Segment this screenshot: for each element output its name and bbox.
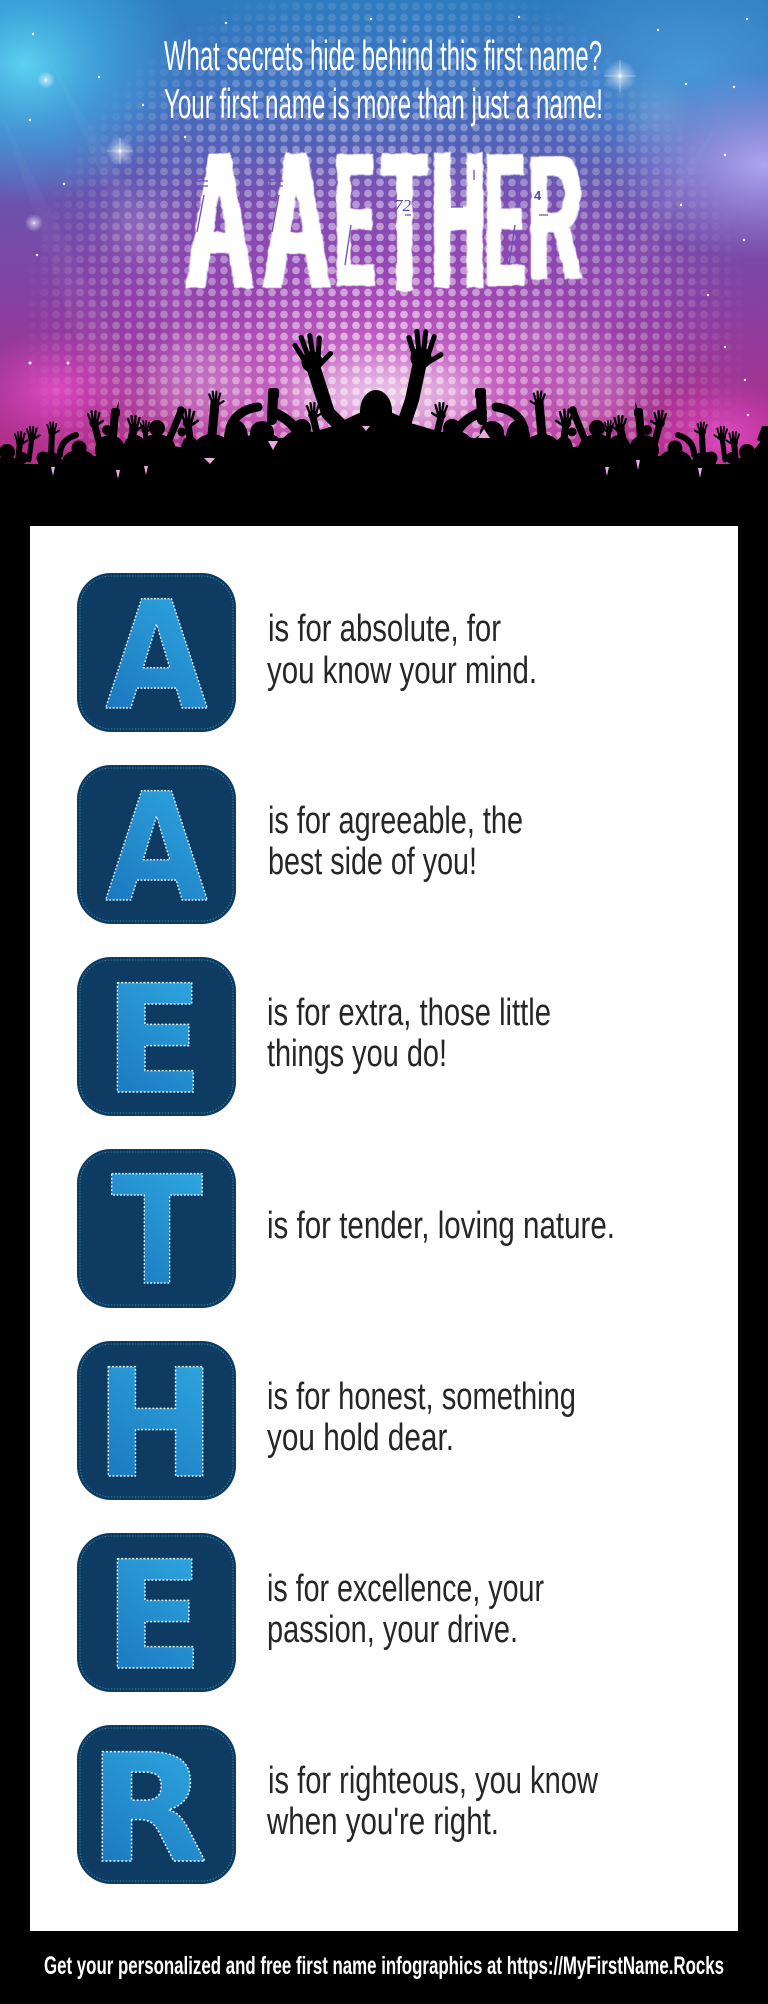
icon: letter H: H — [95, 1338, 216, 1512]
text: A meaning — [267, 608, 537, 692]
header background: stage lights — [0, 0, 768, 515]
icon: letter A: A — [105, 570, 208, 744]
title: name AAETHER: 4 — [534, 188, 542, 203]
icon: letter E — [77, 954, 236, 1128]
crowd silhouette — [0, 331, 768, 530]
text: R meaning: when you're right. — [266, 1801, 499, 1843]
text: E meaning: things you do! — [267, 1033, 447, 1075]
title: name AAETHER: 72 — [394, 196, 412, 215]
icon: letter T: T — [111, 1145, 203, 1319]
text: R meaning: is for righteous, you know — [268, 1760, 598, 1802]
title: name AAETHER: A — [263, 110, 330, 330]
text: E meaning: is for excellence, your — [267, 1568, 544, 1610]
title: name AAETHER — [186, 110, 581, 334]
text: H meaning: you hold dear. — [267, 1417, 454, 1459]
icon: letter R: R — [88, 1723, 208, 1897]
text: E meaning: is for extra, those little — [267, 992, 551, 1034]
text: A meaning: is for agreeable, the — [268, 800, 523, 842]
icon: letter E: E — [104, 1530, 204, 1704]
text: E meaning: passion, your drive. — [267, 1609, 518, 1651]
icon: letter T — [77, 1145, 236, 1319]
icon: letter A: A — [105, 762, 208, 936]
text: E meaning — [267, 1568, 544, 1651]
header tagline — [164, 32, 603, 127]
text: A meaning: is for absolute, for — [268, 608, 501, 650]
text: E meaning — [267, 992, 551, 1075]
text: A meaning: best side of you! — [268, 841, 477, 883]
title: name AAETHER: E — [336, 114, 374, 328]
text: H meaning — [267, 1376, 576, 1459]
title: name AAETHER: T — [383, 110, 426, 334]
title: name AAETHER: A — [186, 110, 253, 330]
white content panel — [30, 526, 738, 1931]
icon: letter E — [77, 1530, 236, 1704]
text: A meaning — [268, 800, 523, 883]
text: H meaning: is for honest, something — [267, 1376, 576, 1418]
title: name AAETHER: H — [432, 112, 485, 330]
icon: letter E: E — [104, 954, 204, 1128]
title: name AAETHER: E — [486, 114, 524, 328]
text: R meaning — [266, 1760, 598, 1843]
text: T meaning: is for tender, loving nature. — [267, 1205, 615, 1247]
title: name AAETHER: R — [529, 118, 581, 317]
text: A meaning: you know your mind. — [267, 650, 537, 692]
